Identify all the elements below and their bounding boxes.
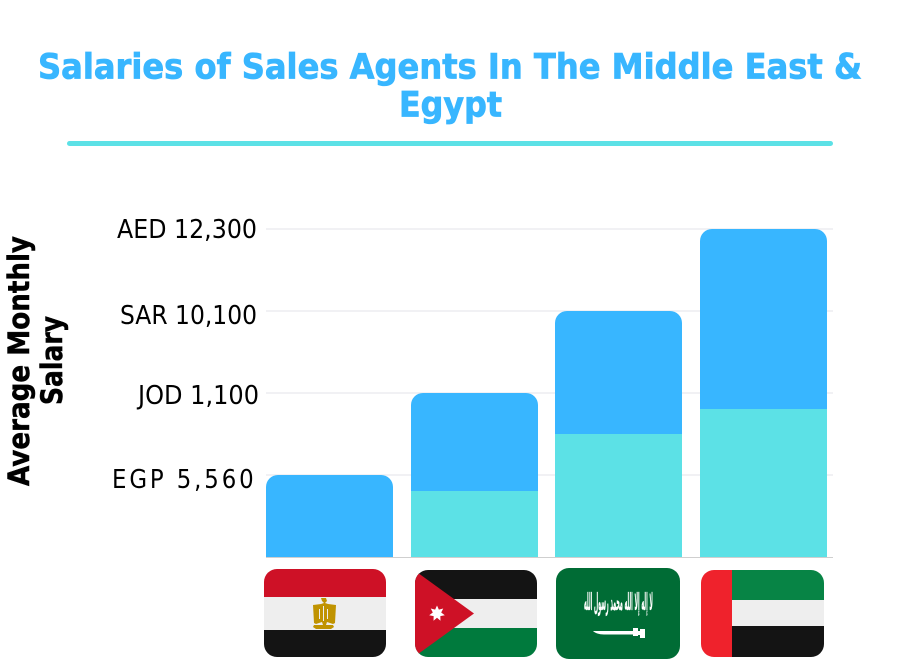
flag: Saudi Arabia: [556, 568, 680, 659]
flag: Egypt: [264, 569, 386, 657]
y axis labels: AED 12,300: [117, 215, 257, 245]
bar: Saudi Arabia: [555, 311, 682, 557]
y axis title: Average Monthly: [2, 236, 36, 486]
title underline: [67, 141, 833, 146]
y axis title: [2, 236, 69, 486]
bar: UAE: [700, 229, 827, 557]
y axis labels: JOD 1,100: [136, 381, 259, 411]
icon: sword: [593, 628, 645, 638]
y axis labels: [112, 215, 259, 494]
y axis title: Salary: [35, 316, 69, 405]
bar: Egypt: [266, 475, 393, 557]
x axis line: [266, 556, 833, 558]
flag: Jordan: [414, 570, 537, 657]
icon: star: [429, 606, 445, 621]
bar: Jordan: [411, 393, 538, 557]
title: Egypt: [399, 86, 502, 126]
y axis labels: EGP 5,560: [112, 464, 254, 494]
icon: eagle emblem: [313, 598, 336, 629]
title: [38, 48, 862, 126]
y axis labels: SAR 10,100: [120, 301, 257, 331]
flag: UAE: [701, 570, 824, 657]
